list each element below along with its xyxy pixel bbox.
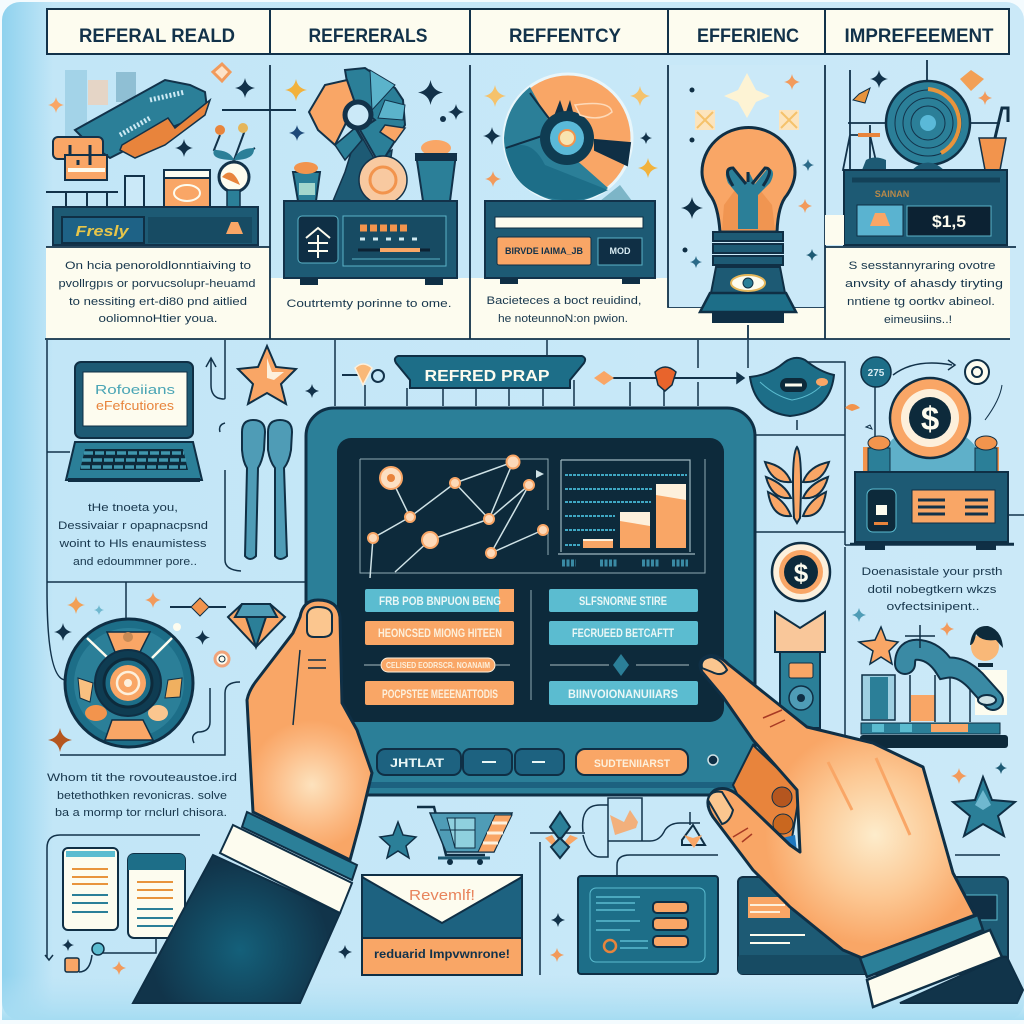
menu buttons (364, 589, 698, 705)
caption 3 (486, 295, 642, 325)
caption: wheel: Whom tit the rovouteaustoe.ird (47, 772, 237, 784)
tablet buttons: SUDTENIIARST (594, 758, 670, 770)
banner (395, 356, 585, 388)
icon: dollar coin: $ (794, 558, 809, 588)
caption 5: S sesstannyraring ovotre (848, 260, 996, 272)
menu buttons: POCPSTEE MEEENATTODIS (382, 687, 498, 701)
bar chart (558, 460, 695, 563)
heading 2: REFERERALS (308, 26, 428, 47)
icon: leaves (765, 447, 829, 523)
line chart (360, 456, 705, 578)
envelope: Revemlf! (409, 887, 475, 904)
credit card (738, 877, 1008, 974)
panel 4 illustration: light bulb (669, 65, 824, 323)
console label: Fresly (76, 223, 129, 240)
icon: eye badge (750, 358, 860, 416)
bottom row: phones (63, 848, 185, 938)
tablet buttons: JHTLAT (390, 756, 445, 770)
icon: diamond (228, 604, 285, 647)
caption: right: ovfectsinipent.. (886, 601, 980, 613)
heading 1: REFERAL REALD (79, 26, 235, 47)
caption 1: On hcia penoroldlonntiaiving to (65, 260, 251, 272)
card panel (578, 876, 718, 974)
laptop label: Rofoeiians (95, 382, 176, 397)
caption 1: ooliomnoHtier youa. (98, 313, 218, 325)
connector lines (45, 340, 1024, 975)
flow arrows (342, 364, 744, 391)
panel 1 illustration (46, 64, 296, 245)
panel 2 illustration (284, 68, 464, 285)
coin group: $ (921, 400, 939, 437)
heading 5: IMPREFEEMENT (844, 26, 994, 47)
icon: wheel (65, 619, 193, 747)
caption 3: Bacieteces a boct reuidind, (486, 295, 642, 307)
bottom stars (338, 762, 1015, 962)
caption 5: eimeusiins..! (884, 314, 952, 326)
icon: dollar coin (772, 543, 830, 601)
caption: laptop: woint to Hls enaumistess (58, 538, 207, 550)
right hand pointing (700, 656, 1023, 1007)
bar label: BIRVDE IAIMA_JB (505, 246, 583, 256)
cart (417, 807, 512, 865)
right bottom scene (852, 608, 1008, 748)
button label: MOD (610, 246, 631, 256)
panel 5 illustration: radar (825, 60, 1008, 245)
caption 1 (58, 260, 255, 325)
caption: right (862, 566, 1002, 613)
bottom-left decorations (48, 592, 229, 752)
caption: wheel: betethothken revonicras. solve (57, 790, 227, 802)
console label: SAINAN (875, 189, 909, 199)
caption 5: nntiene tg oortkv abineol. (847, 296, 995, 308)
caption 1: to nessiting ert-di80 pnd aitlied (69, 296, 247, 308)
heading 3: REFFENTCY (509, 26, 621, 47)
bookmark device (775, 612, 825, 728)
caption panels and dividers (45, 65, 1016, 339)
header row (47, 9, 1009, 54)
caption: right: Doenasistale your prsth (862, 566, 1002, 578)
laptop (66, 362, 202, 482)
icon: star (238, 346, 319, 404)
caption: right: dotil nobegtkern wkzs (868, 584, 997, 596)
menu buttons: SLFSNORNE STIRE (579, 594, 667, 608)
badge label: 275 (868, 368, 885, 379)
tablet screen (337, 438, 724, 722)
coin group (861, 357, 1002, 472)
caption 5: anvsity of ahasdy tiryting (845, 278, 1003, 290)
menu buttons: FECRUEED BETCAFTT (572, 626, 675, 640)
heading 4: EFFERIENC (697, 26, 799, 47)
menu buttons: CELISED EODRSCR. NOANAIM (386, 661, 490, 670)
laptop: eFefcutiores (96, 398, 175, 413)
caption: wheel: ba a mormp tor rnclurl chisora. (55, 807, 227, 819)
menu buttons: HEONCSED MIONG HITEEN (378, 626, 502, 640)
menu buttons: BIINVOIONANUIIARS (568, 687, 678, 701)
price: $1,5 (932, 212, 966, 231)
caption 1: pvollrgpıs or porvucsolupr-heuamd (58, 278, 255, 290)
panel 3 illustration (483, 74, 658, 284)
console: lock (850, 472, 1014, 550)
left sleeve and hand (133, 600, 372, 1003)
caption: laptop (58, 502, 208, 568)
envelope: reduarid Impvwnrone! (374, 949, 510, 961)
caption 5 (845, 260, 1003, 326)
icon: spoons (242, 420, 292, 559)
caption: wheel (47, 772, 237, 819)
caption 2: Coutrtemty porinne to ome. (286, 298, 452, 310)
banner: REFRED PRAP (424, 368, 550, 385)
tablet buttons (352, 749, 745, 785)
envelope (362, 875, 522, 975)
menu buttons: FRB POB BNPUON BENG (379, 594, 501, 608)
caption: laptop: Dessivaiar r opapnacpsnd (58, 520, 208, 532)
caption: laptop: and edoummner pore.. (73, 556, 197, 568)
tablet (306, 408, 755, 795)
caption: laptop: tHe tnoeta you, (88, 502, 178, 514)
caption 3: he noteunnoN:on pwion. (498, 313, 628, 325)
bottom-left small icons (62, 938, 156, 975)
